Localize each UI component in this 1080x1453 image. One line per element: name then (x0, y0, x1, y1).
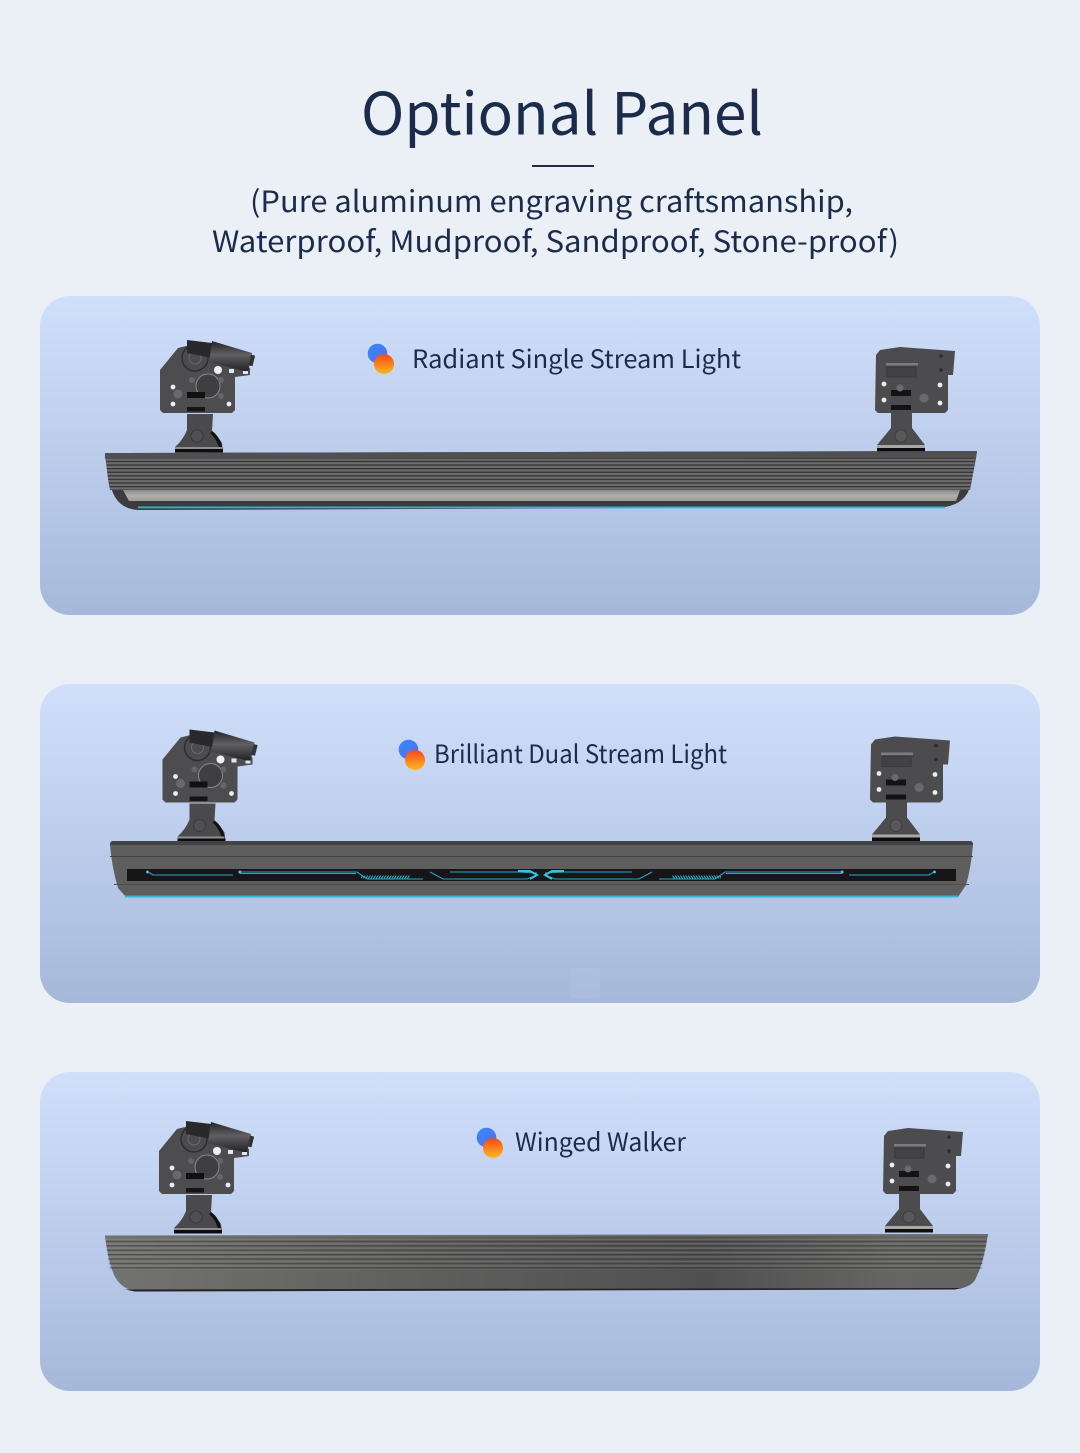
right bracket (875, 347, 955, 452)
icon: overlapping dots (368, 344, 394, 374)
subtitle: (Pure aluminum engraving craftsmanship, (250, 179, 853, 221)
running board, plain (105, 1234, 988, 1292)
icon: overlapping dots (477, 1128, 503, 1158)
panel: Brilliant Dual Stream Light (40, 684, 1040, 1003)
panel background (40, 296, 1040, 615)
right bracket (883, 1128, 963, 1232)
circuit light pattern (146, 870, 936, 879)
title divider (532, 165, 594, 167)
panel background (40, 684, 1040, 1003)
running board with circuit light (110, 841, 973, 898)
panel: Winged Walker (40, 1072, 1040, 1391)
panel label: Radiant Single Stream Light (412, 340, 742, 376)
icon: overlapping dots (399, 740, 425, 770)
subtitle (212, 179, 899, 261)
left motor bracket (159, 1121, 254, 1234)
left motor bracket (162, 730, 258, 842)
watermark square (570, 968, 600, 998)
running board with single light (105, 451, 977, 510)
panel: Radiant Single Stream Light (40, 296, 1040, 615)
panel background (40, 1072, 1040, 1391)
right bracket (870, 736, 950, 841)
subtitle: Waterproof, Mudproof, Sandproof, Stone-proof) (212, 219, 899, 261)
panel label: Winged Walker (515, 1123, 686, 1159)
title: Optional Panel (361, 68, 763, 152)
left motor bracket (160, 340, 255, 452)
panel label: Brilliant Dual Stream Light (434, 735, 728, 771)
